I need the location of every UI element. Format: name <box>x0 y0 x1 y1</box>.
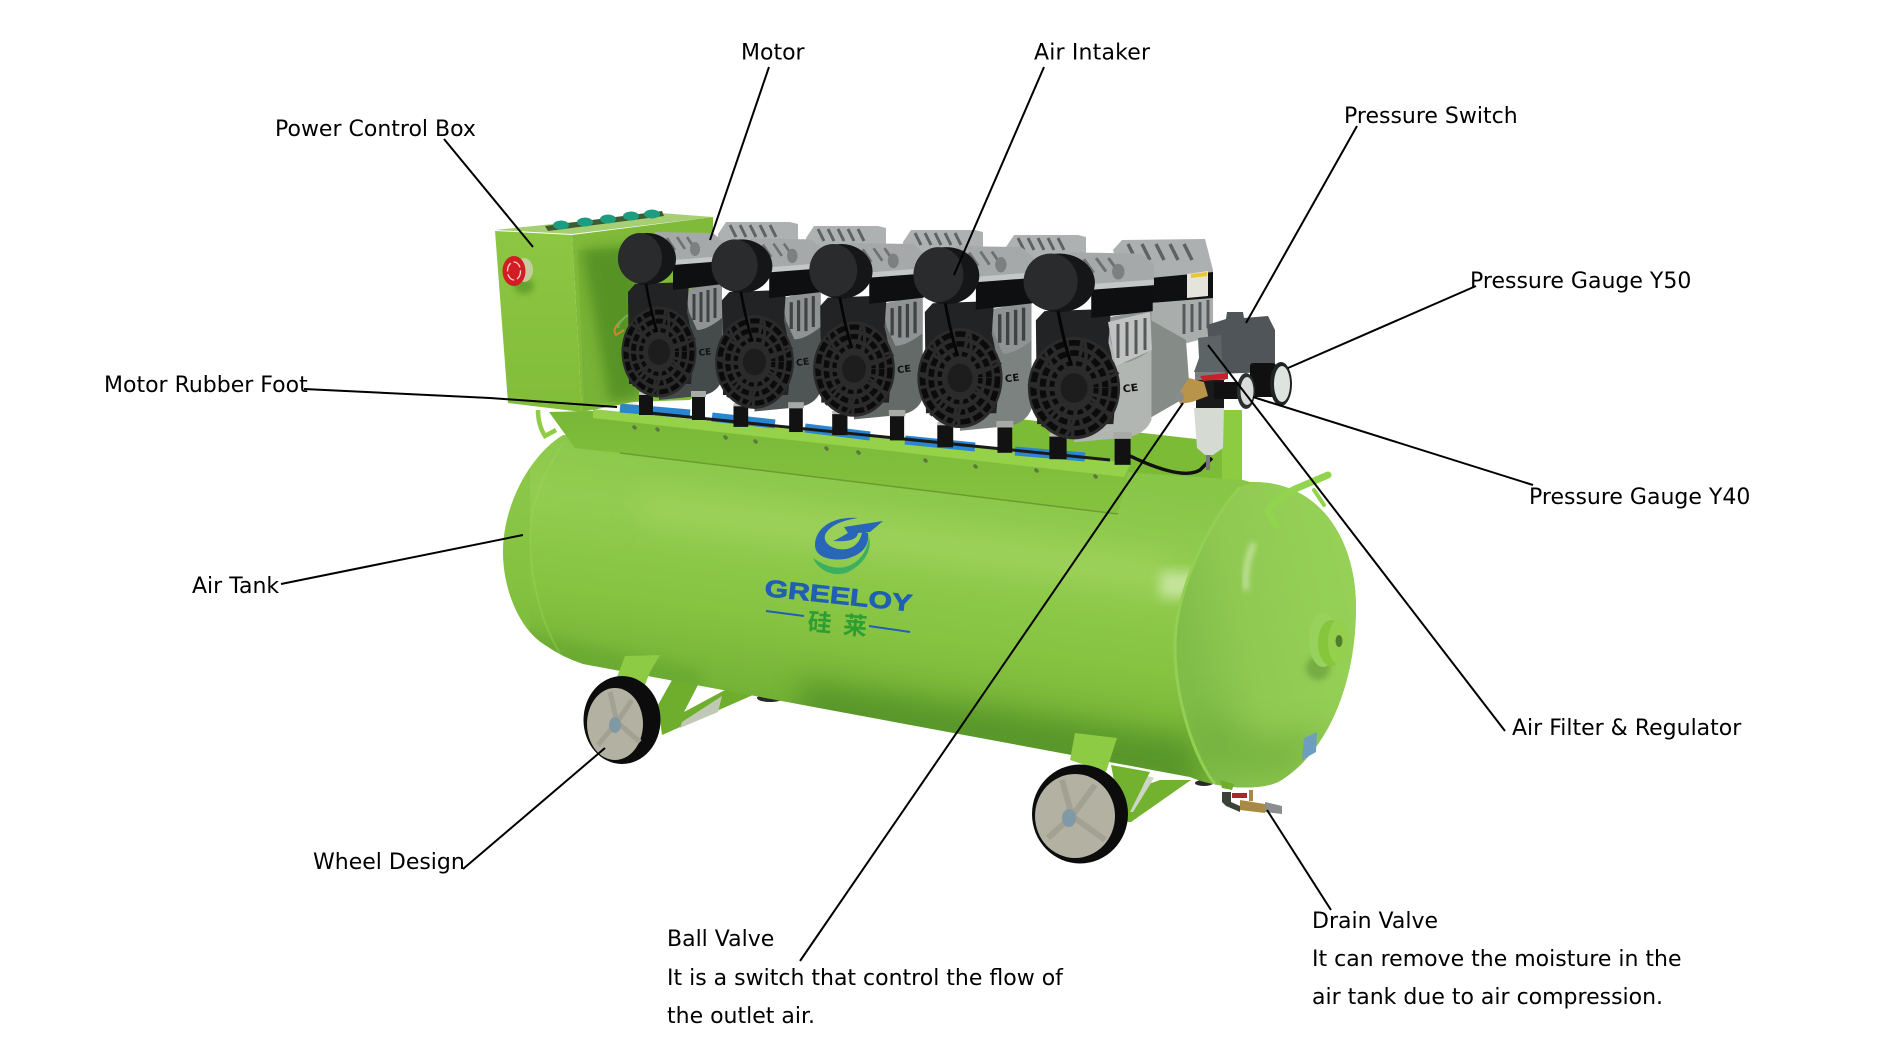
air filter and regulator <box>1194 335 1225 372</box>
rear motor gear housing <box>1147 318 1190 418</box>
drain valve <box>1220 780 1282 814</box>
text block: drain valve: It can remove the moisture in the <box>1312 947 1682 972</box>
pressure switch box <box>1207 312 1275 374</box>
tank end cap <box>1176 482 1356 788</box>
text block: ball valve: Ball Valve <box>667 927 774 952</box>
label: air intaker: Air Intaker <box>1034 40 1151 66</box>
greeloy logo <box>763 518 913 641</box>
gauge Y50 <box>1250 363 1276 397</box>
rear support plate and pipe <box>1010 410 1242 490</box>
logo chinese name: 硅 莱 <box>806 609 868 641</box>
rear cylinder heads <box>718 222 1213 345</box>
label: air filter and regulator: Air Filter & Regulator <box>1512 716 1742 741</box>
label: air tank: Air Tank <box>192 574 279 599</box>
wheels <box>584 655 1128 864</box>
text block: drain valve: air tank due to air compression. <box>1312 985 1663 1010</box>
right wheel <box>1032 764 1128 864</box>
text block: ball valve: It is a switch that control the flow of <box>667 966 1064 991</box>
filter regulator, switch and gauges <box>1176 312 1292 470</box>
tank handle <box>1268 475 1328 525</box>
label: pressure switch: Pressure Switch <box>1344 104 1518 129</box>
green switches <box>545 211 664 231</box>
left wheel <box>584 676 660 764</box>
label: pressure gauge y40: Pressure Gauge Y40 <box>1529 485 1750 510</box>
label: power control box: Power Control Box <box>275 117 476 142</box>
text block: drain valve: Drain Valve <box>1312 909 1438 934</box>
label: wheel design: Wheel Design <box>313 850 465 875</box>
air tank <box>503 435 1370 800</box>
label: motor rubber foot: Motor Rubber Foot <box>104 373 308 398</box>
tank sticker <box>1302 732 1317 760</box>
blue foam mounts <box>620 408 1085 457</box>
logo wordmark: GREELOY <box>763 575 913 617</box>
leader lines <box>281 67 1533 961</box>
red valve lever <box>1200 373 1228 381</box>
left wheel bracket <box>617 655 660 690</box>
logo swirl icon <box>815 518 868 559</box>
motor mounting plate <box>538 408 1212 514</box>
emergency stop button <box>514 278 534 294</box>
right wheel bracket <box>1070 733 1117 772</box>
warning label <box>1187 271 1208 298</box>
left end cap seam <box>532 572 560 654</box>
tank flange <box>1306 613 1348 680</box>
text block: ball valve: the outlet air. <box>667 1004 815 1029</box>
label: motor: Motor <box>741 40 806 66</box>
power control box <box>495 210 713 412</box>
label: pressure gauge y50: Pressure Gauge Y50 <box>1470 269 1691 294</box>
motor units <box>618 232 1190 465</box>
gauge Y40 <box>1214 382 1244 399</box>
brass ball valve <box>1177 378 1208 404</box>
left and right wheel legs <box>658 680 1213 822</box>
